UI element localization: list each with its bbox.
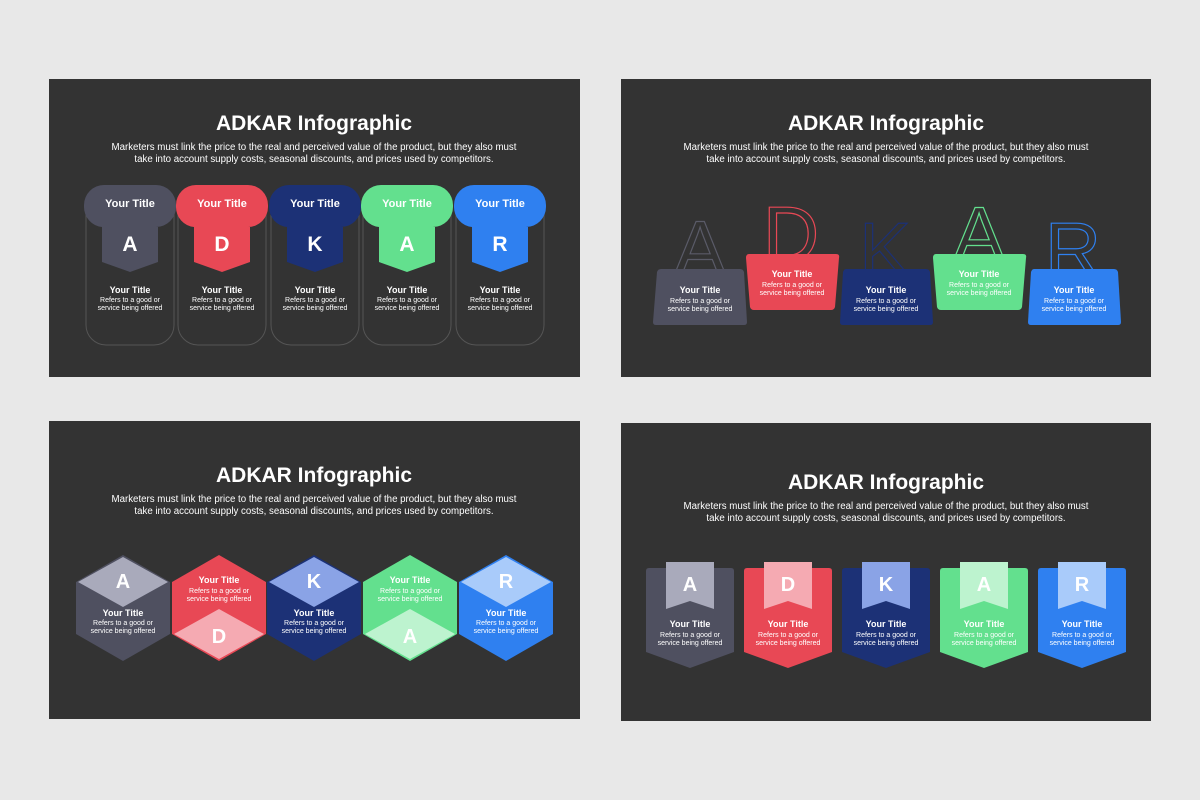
step K: Refers to a good or <box>856 298 917 305</box>
hex A: A <box>116 571 130 593</box>
hex R <box>459 555 553 661</box>
hex A2: Your Title <box>390 575 430 585</box>
card A2: Your Title <box>387 285 427 295</box>
step R: Refers to a good or <box>1044 298 1105 305</box>
card A2: A <box>399 233 415 256</box>
subtitle: take into account supply costs, seasonal discounts, and prices used by competitors. <box>706 154 1066 165</box>
card K: Your Title <box>290 198 340 210</box>
card D: Your Title <box>197 198 247 210</box>
ribbon R: R <box>1075 574 1090 596</box>
step A: Refers to a good or <box>670 298 731 305</box>
hex K: Your Title <box>294 608 334 618</box>
subtitle: Marketers must link the price to the real and perceived value of the product, but they also must <box>112 494 517 505</box>
ribbon A2: service being offered <box>952 640 1017 647</box>
ribbon R <box>1038 562 1126 668</box>
step D: Refers to a good or <box>762 282 823 289</box>
step D <box>746 190 839 310</box>
ribbon R: Refers to a good or <box>1052 632 1113 639</box>
hex A2: Refers to a good or <box>380 588 441 595</box>
subtitle <box>684 501 1089 524</box>
card A2: service being offered <box>375 305 440 312</box>
step A2: Your Title <box>959 269 999 279</box>
ribbon D: Refers to a good or <box>758 632 819 639</box>
subtitle: Marketers must link the price to the real and perceived value of the product, but they also must <box>684 142 1089 153</box>
card K <box>269 185 361 345</box>
step R: service being offered <box>1042 306 1107 313</box>
ribbon A: Your Title <box>670 619 710 629</box>
hex D: Refers to a good or <box>189 588 250 595</box>
step A: Your Title <box>680 285 720 295</box>
card A: Your Title <box>110 285 150 295</box>
ribbon A2: A <box>977 574 991 596</box>
step R: Your Title <box>1054 285 1094 295</box>
ribbon A <box>646 562 734 668</box>
card R: R <box>492 233 508 256</box>
hex D: D <box>212 626 226 648</box>
hex A <box>76 555 170 661</box>
card D: Refers to a good or <box>192 297 253 304</box>
card D: service being offered <box>190 305 255 312</box>
card A2: Refers to a good or <box>377 297 438 304</box>
card D: D <box>214 233 230 256</box>
ribbon R: service being offered <box>1050 640 1115 647</box>
card A: Your Title <box>105 198 155 210</box>
ribbon A: Refers to a good or <box>660 632 721 639</box>
hex D: Your Title <box>199 575 239 585</box>
step R: R <box>1045 206 1101 294</box>
ribbon D <box>744 562 832 668</box>
hex D: service being offered <box>187 596 252 603</box>
subtitle: take into account supply costs, seasonal discounts, and prices used by competitors. <box>134 154 494 165</box>
card A: A <box>122 233 138 256</box>
card A2 <box>361 185 453 345</box>
hex R: Refers to a good or <box>476 620 537 627</box>
card A: Refers to a good or <box>100 297 161 304</box>
hex R: R <box>499 571 514 593</box>
ribbon K: Refers to a good or <box>856 632 917 639</box>
ribbon K: Your Title <box>866 619 906 629</box>
card D: Your Title <box>202 285 242 295</box>
card A: service being offered <box>98 305 163 312</box>
card D <box>176 185 268 345</box>
ribbon A2 <box>940 562 1028 668</box>
step K: service being offered <box>854 306 919 313</box>
step A2 <box>933 190 1026 310</box>
step D: Your Title <box>772 269 812 279</box>
hex A: service being offered <box>91 628 156 635</box>
card A <box>84 185 176 345</box>
step A2: service being offered <box>947 290 1012 297</box>
ribbon D: D <box>781 574 795 596</box>
hex R: Your Title <box>486 608 526 618</box>
title: ADKAR Infographic <box>216 112 412 135</box>
title: ADKAR Infographic <box>788 471 984 494</box>
step A2: A <box>953 190 1005 278</box>
hex K <box>267 555 361 661</box>
card R <box>454 185 546 345</box>
subtitle: take into account supply costs, seasonal discounts, and prices used by competitors. <box>134 506 494 517</box>
card R: Your Title <box>480 285 520 295</box>
step K: K <box>859 206 911 294</box>
card K: K <box>307 233 323 256</box>
hex K: Refers to a good or <box>284 620 345 627</box>
card K: Your Title <box>295 285 335 295</box>
hex A2: A <box>403 626 417 648</box>
ribbon A: service being offered <box>658 640 723 647</box>
ribbon K <box>842 562 930 668</box>
step A: A <box>674 204 726 292</box>
step R <box>1028 206 1121 325</box>
panel: bottom-right ribbons <box>621 423 1151 721</box>
title: ADKAR Infographic <box>788 112 984 135</box>
hex A: Refers to a good or <box>93 620 154 627</box>
panel: top-left pill cards <box>49 79 580 377</box>
subtitle: Marketers must link the price to the real and perceived value of the product, but they also must <box>684 501 1089 512</box>
card A2: Your Title <box>382 198 432 210</box>
subtitle <box>112 142 517 165</box>
card K: Refers to a good or <box>285 297 346 304</box>
ribbon R: Your Title <box>1062 619 1102 629</box>
step K: Your Title <box>866 285 906 295</box>
hex K: service being offered <box>282 628 347 635</box>
title: ADKAR Infographic <box>216 464 412 487</box>
card K: service being offered <box>283 305 348 312</box>
panel: top-right outlined letters <box>621 79 1151 377</box>
subtitle: take into account supply costs, seasonal discounts, and prices used by competitors. <box>706 513 1066 524</box>
step A <box>653 204 747 325</box>
hex A2: service being offered <box>378 596 443 603</box>
card R: Refers to a good or <box>470 297 531 304</box>
hex A2 <box>363 555 457 661</box>
step K <box>840 206 933 325</box>
hex R: service being offered <box>474 628 539 635</box>
ribbon A: A <box>683 574 697 596</box>
subtitle: Marketers must link the price to the real and perceived value of the product, but they also must <box>112 142 517 153</box>
subtitle <box>112 494 517 517</box>
ribbon D: service being offered <box>756 640 821 647</box>
hex K: K <box>307 571 322 593</box>
hex D <box>172 555 266 661</box>
subtitle <box>684 142 1089 165</box>
step A2: Refers to a good or <box>949 282 1010 289</box>
panel: bottom-left hexagons <box>49 421 580 719</box>
ribbon A2: Refers to a good or <box>954 632 1015 639</box>
card R: Your Title <box>475 198 525 210</box>
ribbon A2: Your Title <box>964 619 1004 629</box>
step D: service being offered <box>760 290 825 297</box>
ribbon K: K <box>879 574 894 596</box>
ribbon K: service being offered <box>854 640 919 647</box>
step A: service being offered <box>668 306 733 313</box>
ribbon D: Your Title <box>768 619 808 629</box>
step D: D <box>763 190 819 278</box>
hex A: Your Title <box>103 608 143 618</box>
card R: service being offered <box>468 305 533 312</box>
